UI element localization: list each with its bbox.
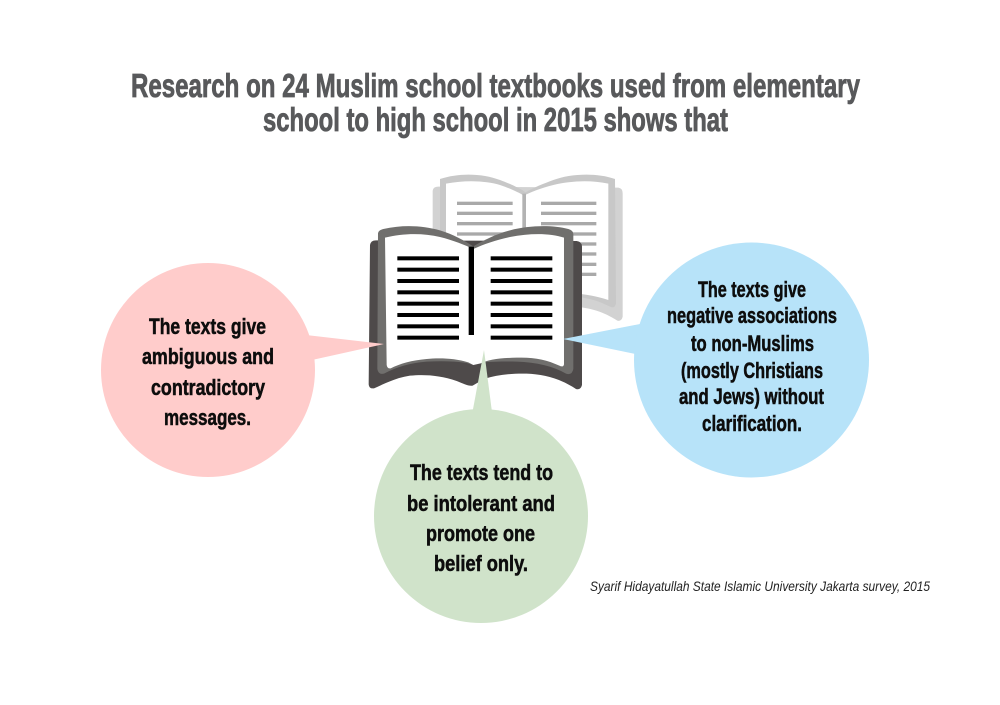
callout: pink ambiguous messages: The texts give (149, 314, 266, 339)
callout: green intolerant texts: be intolerant and (407, 491, 555, 516)
title: school to high school in 2015 shows that (263, 101, 728, 138)
title (131, 67, 860, 138)
callout: blue negative associations: clarification. (702, 411, 802, 436)
icon: background open book (433, 175, 623, 321)
callout: blue negative associations: The texts give (698, 277, 806, 302)
callout: blue negative associations: to non-Muslims (691, 331, 814, 356)
callout: pink ambiguous messages: contradictory (151, 375, 265, 400)
icon: foreground open book (369, 226, 582, 389)
callout: pink ambiguous messages (101, 263, 384, 477)
callout: green intolerant texts: promote one (426, 521, 535, 546)
callout: green intolerant texts (374, 350, 588, 623)
callout: green intolerant texts: belief only. (434, 551, 528, 576)
callout: blue negative associations: (mostly Christians (681, 358, 823, 383)
callout: pink ambiguous messages: messages. (164, 405, 251, 430)
callout: pink ambiguous messages: ambiguous and (142, 344, 274, 369)
callout: blue negative associations (563, 242, 869, 478)
callout: green intolerant texts: The texts tend to (410, 460, 553, 485)
callout: blue negative associations: and Jews) without (679, 384, 824, 409)
source note: Syarif Hidayatullah State Islamic University Jakarta survey, 2015 (590, 578, 930, 594)
callout: blue negative associations: negative associations (667, 303, 837, 328)
